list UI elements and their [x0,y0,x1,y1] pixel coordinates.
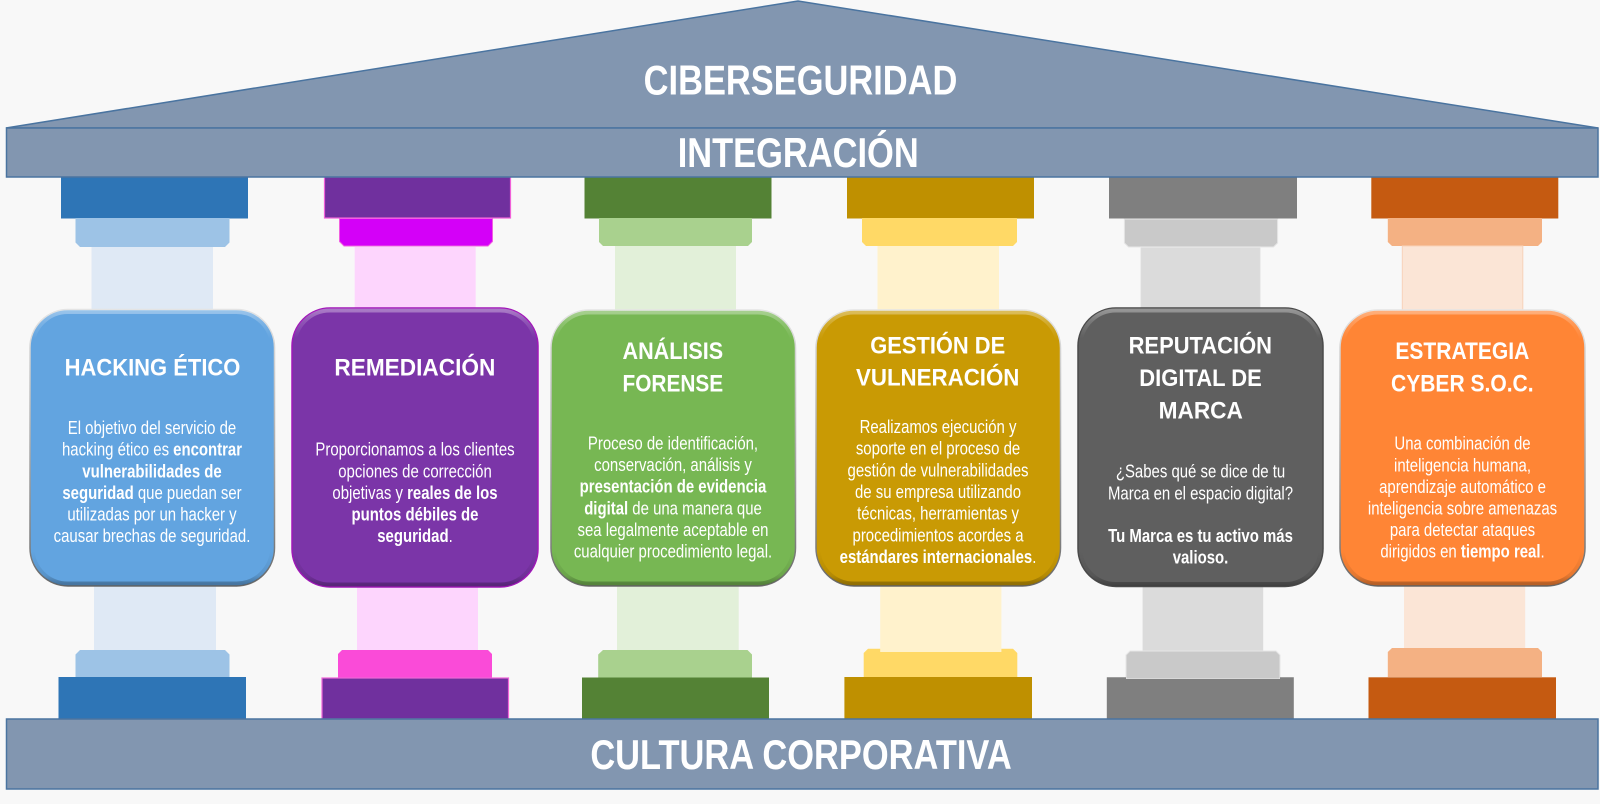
pillar 3: Análisis Forense [551,177,796,719]
body text: seguridad. [377,526,453,546]
base [1368,677,1556,719]
card [30,310,274,586]
capital [1109,177,1297,218]
pillar 4: Gestión de Vulneración [816,177,1060,719]
lower shaft [94,585,216,651]
upper shaft [615,246,736,311]
upper shaft [878,246,999,311]
body text: técnicas, herramientas y [857,503,1020,524]
body text: seguridad que puedan ser [62,483,242,503]
capital [584,177,772,218]
body text: inteligencia sobre amenazas [1368,498,1557,519]
body text: opciones de corrección [338,461,492,482]
body text [1108,461,1293,568]
body text: cualquier procedimiento legal. [574,541,772,562]
lower shaft [1143,585,1263,652]
lower shaft [1404,585,1525,650]
upper collar [340,218,492,246]
pillar 1: Hacking Ético [30,177,274,719]
body text: de su empresa utilizando [855,482,1021,502]
upper shaft [1402,246,1523,311]
base [58,677,246,719]
heading: HACKING ÉTICO [65,353,240,381]
body text: puntos débiles de [352,504,478,525]
body text [1368,433,1557,562]
pillar 5: Reputación Digital de Marca [1078,177,1323,719]
body text: presentación de evidencia [580,476,767,497]
title: Ciberseguridad: CIBERSEGURIDAD [644,57,957,104]
heading: GESTIÓN DE [870,331,1005,359]
capital [61,177,248,218]
lower shaft [357,585,478,651]
heading: REPUTACIÓN [1129,331,1272,359]
upper collar [862,218,1017,246]
body text: ¿Sabes qué se dice de tu [1116,461,1285,482]
body text: Proporcionamos a los clientes [315,439,515,460]
lower collar [1126,651,1280,679]
roof [6,1,1598,128]
body text: utilizadas por un hacker y [67,504,237,525]
body text: conservación, análisis y [594,455,752,475]
heading: FORENSE [622,371,723,398]
beam label: INTEGRACIÓN [678,129,919,177]
base [322,678,508,719]
body text: Tu Marca es tu activo más [1108,526,1293,546]
lower collar [864,649,1017,678]
heading: ESTRATEGIA [1395,338,1529,365]
body text [315,439,515,546]
body text: Realizamos ejecución y [860,417,1017,437]
body text: para detectar ataques [1390,520,1535,540]
heading: REMEDIACIÓN [334,353,495,381]
body text: procedimientos acordes a [853,525,1024,546]
heading: CYBER S.O.C. [1391,371,1534,398]
capital [1371,177,1558,218]
lower collar [76,650,230,678]
body text: hacking ético es encontrar [62,439,243,460]
body text: Una combinación de [1394,433,1531,454]
heading [1129,331,1272,425]
body text: valioso. [1173,547,1228,568]
body text: gestión de vulnerabilidades [848,460,1028,481]
body text [574,433,772,562]
pillar 2: Remediación [292,177,538,719]
body text: causar brechas de seguridad. [54,526,250,546]
heading [856,331,1019,392]
upper shaft [92,247,213,311]
body text: Marca en el espacio digital? [1108,483,1293,504]
card [816,310,1060,586]
upper collar [1124,219,1278,247]
heading: ANÁLISIS [622,337,723,365]
body text: Proceso de identificación, [588,433,758,454]
body text: aprendizaje automático e [1379,477,1546,497]
body text [54,418,250,546]
lower shaft [880,585,1001,652]
lower collar [1388,648,1542,677]
body text: soporte en el proceso de [856,438,1020,459]
heading [1391,338,1534,398]
beam: Integración [6,128,1598,177]
heading: VULNERACIÓN [856,364,1019,392]
body text: sea legalmente aceptable en [578,520,768,540]
lower shaft [617,585,739,651]
card [292,308,538,587]
card [1340,310,1585,586]
foundation label: CULTURA CORPORATIVA [590,732,1012,779]
upper shaft [1141,247,1260,311]
base [844,677,1032,719]
body text [840,417,1036,567]
pillar 6: Estrategia Cyber S.O.C. [1340,177,1585,719]
base [582,678,769,719]
heading: DIGITAL DE [1139,365,1262,392]
upper collar [76,218,230,247]
heading: MARCA [1159,398,1243,425]
body text: vulnerabilidades de [82,461,222,482]
heading [622,337,723,398]
body text: objetivas y reales de los [332,483,498,503]
body text: estándares internacionales. [840,547,1036,567]
lower collar [338,650,492,678]
upper shaft [355,247,476,311]
foundation: Cultura Corporativa [6,719,1598,789]
upper collar [1388,218,1542,246]
capital [847,177,1034,218]
capital [324,177,510,218]
card [551,310,796,586]
card [1078,308,1323,586]
upper collar [599,218,752,246]
lower collar [598,650,752,679]
body text: digital de una manera que [584,498,762,519]
body text: dirigidos en tiempo real. [1380,541,1545,562]
body text: El objetivo del servicio de [68,418,236,438]
base [1107,677,1294,719]
body text: inteligencia humana, [1394,455,1531,476]
